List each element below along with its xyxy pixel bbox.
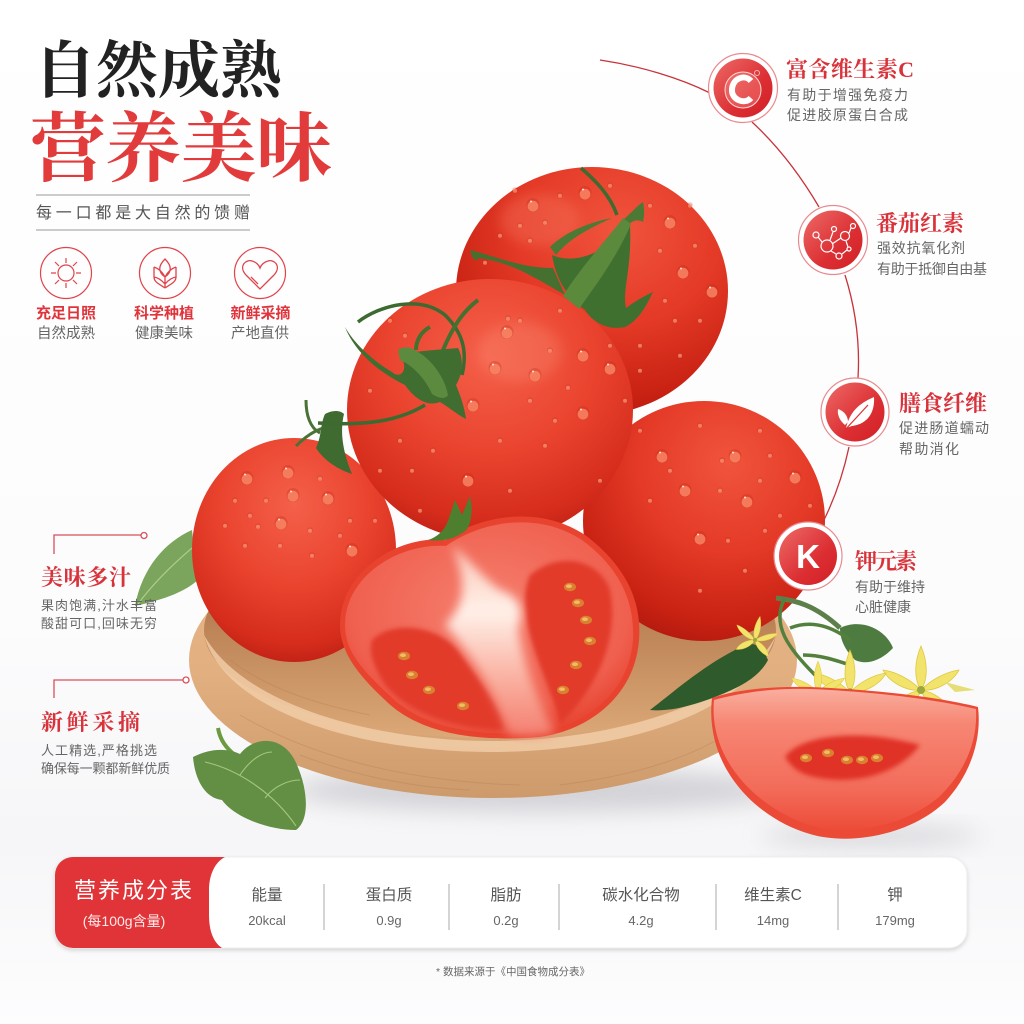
nutrient: potassium: 钾元素: [855, 549, 917, 574]
nutrient: potassium: 有助于维持: [855, 579, 925, 595]
title: 营养美味: [30, 108, 332, 192]
feature: scientific planting: 科学种植: [134, 304, 194, 322]
icon: leaves: [838, 397, 874, 431]
left stem: [296, 400, 352, 474]
title: [30, 38, 332, 192]
tomato: left: [192, 400, 396, 662]
column labels: 维生素C: [744, 886, 802, 904]
nutrient: vitamin C: 有助于增强免疫力: [787, 87, 908, 103]
column labels: 碳水化合物: [602, 886, 680, 904]
nutrient: vitamin C: 促进胶原蛋白合成: [787, 107, 908, 123]
connector arc: [600, 60, 858, 522]
nutrient: lycopene: 番茄红素: [876, 211, 964, 236]
nutrient: vitamin C: 富含维生素C: [786, 57, 914, 82]
icon: molecule: [813, 224, 856, 259]
subtitle: [36, 195, 250, 230]
feature: fresh picking: 产地直供: [231, 325, 289, 342]
plate and wedge shadows: [290, 768, 980, 846]
column labels: 钾: [887, 886, 903, 904]
tomato: middle: [347, 279, 633, 541]
callout: juicy: [41, 532, 157, 631]
column values: 179mg: [875, 913, 915, 928]
card: [55, 857, 967, 948]
nutrient: vitamin C: [708, 54, 914, 123]
nutrition table: [55, 857, 967, 948]
nutrient: dietary fibre: 帮助消化: [899, 441, 959, 457]
feature: scientific planting: [134, 248, 194, 342]
feature: sunshine: 自然成熟: [37, 325, 95, 342]
wooden plate: [189, 611, 797, 798]
callout: fresh: 确保每一颗都新鲜优质: [41, 761, 170, 776]
callout: juicy: 美味多汁: [41, 565, 131, 590]
nutrient: lycopene: 强效抗氧化剂: [877, 240, 965, 256]
column values: 14mg: [757, 913, 789, 928]
nutrient: dietary fibre: 促进肠道蠕动: [899, 420, 989, 436]
red header: (每100g含量): [83, 913, 165, 929]
photo: tomatoes on wooden plate: [135, 167, 980, 846]
callout: fresh: [41, 677, 189, 776]
red header: 营养成分表: [74, 878, 192, 903]
nutrient: dietary fibre: [821, 378, 989, 457]
column values: 0.2g: [493, 913, 519, 928]
red header: [55, 857, 225, 948]
icon: sun: [51, 258, 81, 288]
back-left leaf: [135, 530, 198, 606]
column values: 20kcal: [248, 913, 286, 928]
column values: [248, 913, 915, 928]
nutrient: potassium: [774, 522, 925, 615]
tomato: top back: [456, 167, 728, 415]
callout: juicy: 酸甜可口,回味无穷: [41, 616, 157, 631]
nutrient: lycopene: 有助于抵御自由基: [877, 261, 987, 277]
icon: wheat: [154, 259, 176, 288]
column labels: 蛋白质: [366, 886, 412, 904]
tomato wedge: [711, 687, 979, 839]
column values: 4.2g: [628, 913, 654, 928]
feature: sunshine: [36, 248, 96, 342]
subtitle: 每一口都是大自然的馈赠: [36, 204, 250, 222]
leaves, branch and yellow flowers: [650, 598, 975, 715]
stem: top tomato: [470, 168, 653, 328]
tomato: right: [583, 401, 825, 641]
column labels: 脂肪: [490, 886, 522, 904]
icon: heart: [243, 261, 277, 289]
footnote: * 数据来源于《中国食物成分表》: [436, 965, 590, 978]
column labels: 能量: [251, 886, 283, 904]
stem: middle tomato: [318, 300, 478, 424]
feature: fresh picking: 新鲜采摘: [230, 304, 291, 322]
icon: letter K: K: [796, 538, 820, 575]
title: 自然成熟: [34, 38, 285, 106]
feature: sunshine: 充足日照: [36, 304, 96, 322]
column labels: [251, 886, 903, 904]
icon: vitamin C bubble: [725, 70, 761, 108]
callout: fresh: 新鲜采摘: [41, 710, 140, 735]
feature: scientific planting: 健康美味: [135, 325, 193, 342]
column values: 0.9g: [376, 913, 402, 928]
nutrient: lycopene: [798, 206, 987, 277]
nutrient: dietary fibre: 膳食纤维: [899, 391, 987, 416]
callout: juicy: 果肉饱满,汁水丰富: [41, 598, 157, 613]
nutrient: potassium: 心脏健康: [855, 599, 911, 615]
callout: fresh: 人工精选,严格挑选: [41, 743, 157, 758]
tomato: cut half: [340, 496, 639, 738]
feature: fresh picking: [230, 248, 291, 342]
bottom-left leaf: [193, 728, 306, 830]
